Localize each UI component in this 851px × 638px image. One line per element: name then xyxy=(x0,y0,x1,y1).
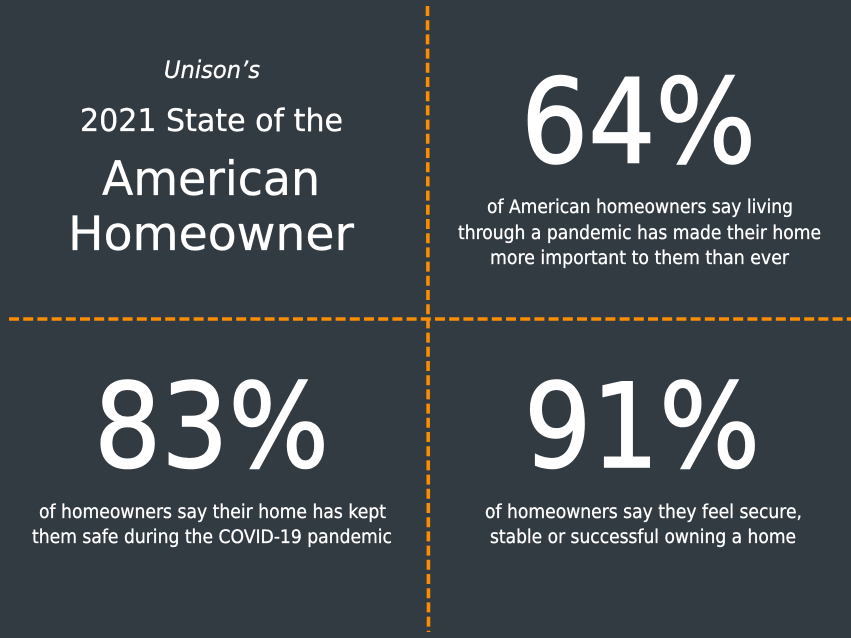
stat description: 64%: of American homeowners say living xyxy=(487,197,793,218)
stat number: 64%: 64% xyxy=(521,54,756,190)
panel: 64% stat xyxy=(458,54,821,269)
stat description: 91% xyxy=(485,502,802,548)
stat number: 83%: 83% xyxy=(94,358,329,495)
subtitle: Unison's: Unison’s xyxy=(164,56,260,84)
title line: American: American xyxy=(102,152,320,207)
panel: 83% stat xyxy=(32,358,392,548)
stat description: 91%: of homeowners say they feel secure, xyxy=(485,502,802,523)
title line: 2021 State of the: 2021 State of the xyxy=(80,103,343,139)
stat description: 83%: them safe during the COVID-19 pandemic xyxy=(32,527,392,548)
title block xyxy=(68,56,355,262)
stat number: 91%: 91% xyxy=(524,358,760,495)
stat description: 64%: more important to them than ever xyxy=(490,248,789,269)
title line: Homeowner: Homeowner xyxy=(68,207,355,262)
stat description: 91%: stable or successful owning a home xyxy=(490,527,796,548)
stat description: 64%: through a pandemic has made their home xyxy=(458,223,821,244)
stat description: 83% xyxy=(32,502,392,548)
panel: 91% stat xyxy=(485,358,802,548)
stat description: 83%: of homeowners say their home has kept xyxy=(39,502,386,523)
stat description: 64% xyxy=(458,197,821,269)
